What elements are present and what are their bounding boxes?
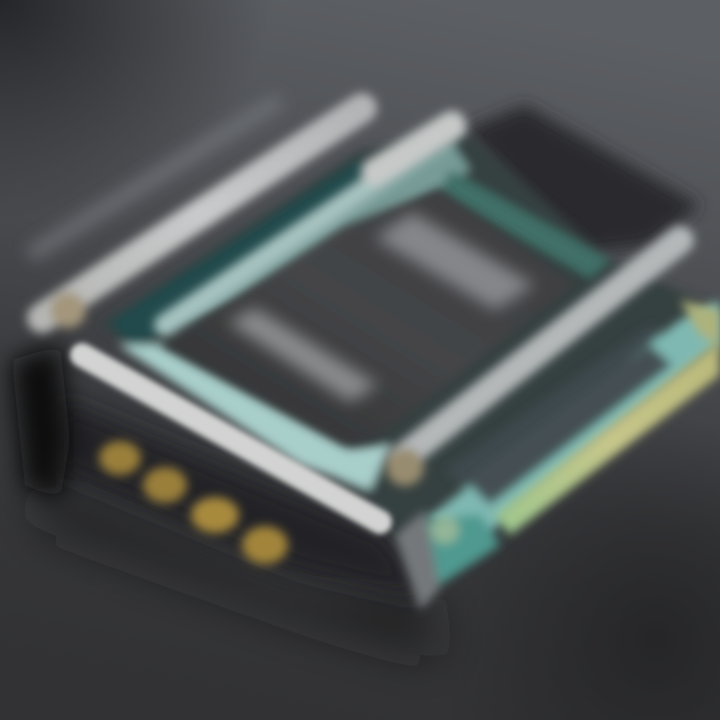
chip highlight stripe lower [228,308,378,402]
faint ghost bar top left [30,100,280,255]
gold green board edge [495,300,720,535]
right silver rail [386,240,680,486]
front body under connectors [60,400,430,600]
right board traces [425,300,720,540]
circuit board base [100,135,720,580]
front left silver rail [82,355,380,522]
dark rear card top right [465,105,700,255]
gold connector pads [99,441,288,564]
left dark bracket [12,345,70,500]
middle silver rail [165,125,455,325]
central chip [160,190,575,445]
top silver rail [42,108,362,328]
cast shadow under card [40,480,440,660]
teal bottom corner [395,510,500,610]
chip highlight stripe upper [375,212,535,310]
